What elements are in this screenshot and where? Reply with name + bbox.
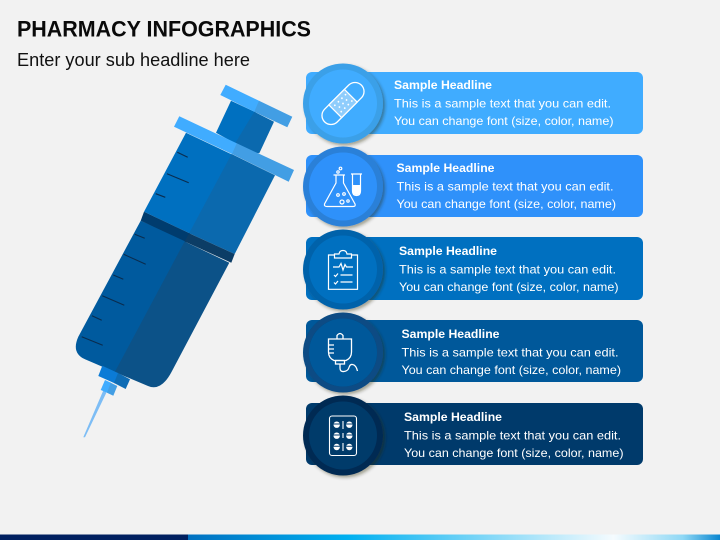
text block 1: Sample Headline [394, 78, 492, 92]
text block 2 [396, 161, 616, 211]
text block 1: This is a sample text that you can edit. [394, 96, 611, 110]
text block 5: You can change font (size, color, name) [404, 446, 624, 460]
text block 3: Sample Headline [399, 244, 497, 258]
needle connector [101, 380, 117, 396]
syringe illustration [76, 85, 294, 437]
circle 3 [303, 230, 383, 310]
text block 3: This is a sample text that you can edit. [399, 262, 616, 276]
circle 5 [303, 396, 383, 476]
text block 2: You can change font (size, color, name) [396, 197, 616, 211]
item 1: bandage [303, 64, 643, 144]
needle [83, 390, 107, 437]
text block 4: This is a sample text that you can edit. [402, 346, 618, 360]
plunger seal band [141, 212, 235, 263]
text block 3: You can change font (size, color, name) [399, 280, 618, 294]
circle 1 [303, 64, 383, 144]
item 5: pills [303, 396, 643, 476]
icon: clipboard [328, 250, 358, 289]
text block 4 [402, 327, 621, 377]
text block 2: Sample Headline [396, 161, 495, 175]
text block 2: This is a sample text that you can edit. [396, 180, 614, 194]
footer bar [0, 534, 720, 540]
barrel upper section [144, 133, 275, 254]
title: PHARMACY INFOGRAPHICS [17, 16, 311, 42]
sub headline: Enter your sub headline here [17, 50, 250, 70]
card 3 [306, 237, 643, 300]
icon: blister pack [330, 416, 356, 456]
icon: bandage [318, 79, 368, 128]
card 1 [306, 72, 643, 134]
card 5 [306, 403, 643, 465]
text block 1 [394, 78, 614, 128]
text block 5: Sample Headline [404, 410, 502, 424]
plunger top flange [220, 85, 292, 127]
icon: flask and test tube [324, 167, 362, 206]
plunger rod [216, 101, 274, 153]
barrel flange [174, 116, 294, 182]
circle 4 [303, 312, 383, 392]
measurement ticks [82, 152, 189, 345]
text block 5 [404, 410, 624, 460]
barrel lower section [76, 221, 229, 387]
item 4: IV bag [303, 312, 643, 392]
text block 3 [399, 244, 618, 294]
item 3: clipboard [303, 230, 643, 310]
text block 4: You can change font (size, color, name) [402, 363, 621, 377]
item 2: flask [303, 146, 643, 226]
needle hub [98, 366, 130, 389]
card 2 [306, 155, 643, 217]
icon: IV drip bag [328, 334, 358, 372]
text block 5: This is a sample text that you can edit. [404, 428, 621, 442]
text block 1: You can change font (size, color, name) [394, 114, 614, 128]
circle 2 [303, 146, 383, 226]
card 4 [306, 320, 643, 382]
text block 4: Sample Headline [402, 327, 500, 341]
